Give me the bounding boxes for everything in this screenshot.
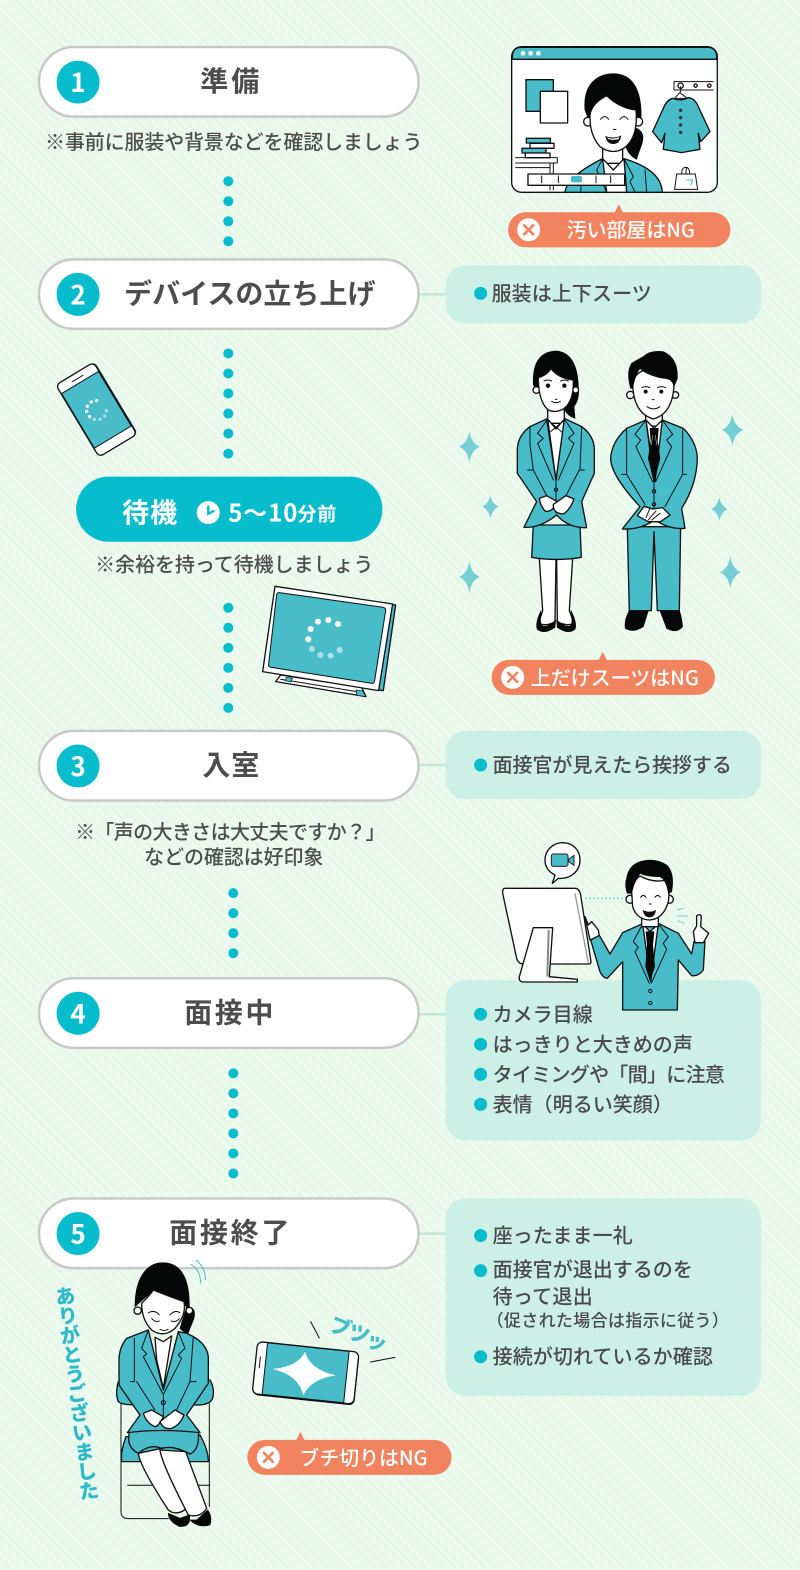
illustration: woman and man in suits bbox=[459, 351, 743, 632]
step 3 pill: 3 bbox=[70, 747, 86, 784]
NG callout: dirty room bbox=[508, 204, 730, 247]
panel: suit advice bbox=[446, 265, 761, 323]
waiting pill bbox=[76, 477, 382, 542]
step 1 pill bbox=[39, 47, 419, 117]
lower bodies bbox=[532, 525, 683, 632]
note: entering: ※「声の大きさは大丈夫ですか？」 bbox=[75, 816, 385, 845]
step 2 pill: デバイスの立ち上げ bbox=[124, 271, 375, 312]
panel: ending: 待って退出 bbox=[493, 1281, 593, 1310]
dotted connector 4 bbox=[228, 888, 238, 958]
step 2 pill: 2 bbox=[70, 275, 86, 312]
step 3 pill: 入室 bbox=[202, 743, 259, 784]
step 5 pill bbox=[39, 1199, 419, 1268]
panel: greeting: 面接官が見えたら挨拶する bbox=[493, 749, 732, 778]
illustration: man looking at camera by monitor bbox=[503, 843, 709, 1010]
step 2 pill bbox=[39, 259, 419, 329]
vertical thanks text: ありがとうございました bbox=[50, 1284, 105, 1502]
waiting pill: 待機 bbox=[122, 492, 177, 531]
panel: during interview: タイミングや「間」に注意 bbox=[493, 1058, 725, 1087]
NG callout: abrupt cut: ブチ切りはNG bbox=[299, 1442, 428, 1471]
note: entering: などの確認は好印象 bbox=[144, 841, 323, 870]
panel: suit advice: 服装は上下スーツ bbox=[492, 277, 652, 306]
illustration: seated woman bowing bbox=[117, 1260, 213, 1527]
NG callout: top half suit bbox=[492, 652, 715, 695]
NG callout: dirty room: 汚い部屋はNG bbox=[567, 214, 695, 243]
dotted connector 5 bbox=[228, 1068, 238, 1179]
waiting pill: 分前 bbox=[297, 500, 336, 527]
panel: during interview bbox=[446, 980, 761, 1140]
panel: ending bbox=[446, 1199, 761, 1396]
step 1 pill: 準備 bbox=[200, 59, 259, 100]
step 4 pill bbox=[39, 978, 419, 1048]
sparkles bbox=[459, 414, 743, 593]
illustration: video call window with messy room bbox=[512, 47, 717, 192]
panel: during interview: カメラ目線 bbox=[493, 998, 593, 1027]
panel: ending: （促された場合は指示に従う） bbox=[487, 1307, 729, 1332]
icon: smartphone loading bbox=[56, 362, 138, 457]
note: entering bbox=[75, 816, 385, 870]
man upper body bbox=[611, 351, 697, 529]
step 5 pill: 5 bbox=[70, 1215, 86, 1252]
panel: ending: 面接官が退出するのを bbox=[493, 1254, 693, 1283]
NG callout: abrupt cut bbox=[247, 1432, 452, 1475]
panel: ending: 接続が切れているか確認 bbox=[493, 1341, 713, 1370]
icon: laptop loading bbox=[263, 586, 396, 697]
panel: during interview: はっきりと大きめの声 bbox=[493, 1028, 693, 1057]
panel: ending: 座ったまま一礼 bbox=[493, 1220, 633, 1249]
woman upper body bbox=[517, 351, 594, 528]
sound text: disconnect: ブツッ bbox=[325, 1309, 392, 1359]
panel: greeting bbox=[446, 731, 761, 799]
icon: smartphone disconnected bbox=[252, 1322, 395, 1406]
step 1 pill: 1 bbox=[70, 63, 86, 100]
step 4 pill: 4 bbox=[70, 994, 86, 1031]
note: waiting: ※余裕を持って待機しましょう bbox=[95, 549, 373, 578]
panel: during interview: 表情（明るい笑顔） bbox=[493, 1088, 673, 1117]
dotted connector 1 bbox=[223, 176, 233, 246]
waiting pill: 5〜10 bbox=[228, 494, 297, 529]
step 3 pill bbox=[39, 731, 419, 801]
step 5 pill: 面接終了 bbox=[169, 1211, 289, 1252]
note: step 1: ※事前に服装や背景などを確認しましょう bbox=[45, 126, 423, 155]
dotted connector 3 bbox=[223, 603, 233, 713]
step 4 pill: 面接中 bbox=[184, 990, 273, 1031]
NG callout: top half suit: 上だけスーツはNG bbox=[531, 662, 699, 691]
dotted connector 2 bbox=[223, 348, 233, 459]
